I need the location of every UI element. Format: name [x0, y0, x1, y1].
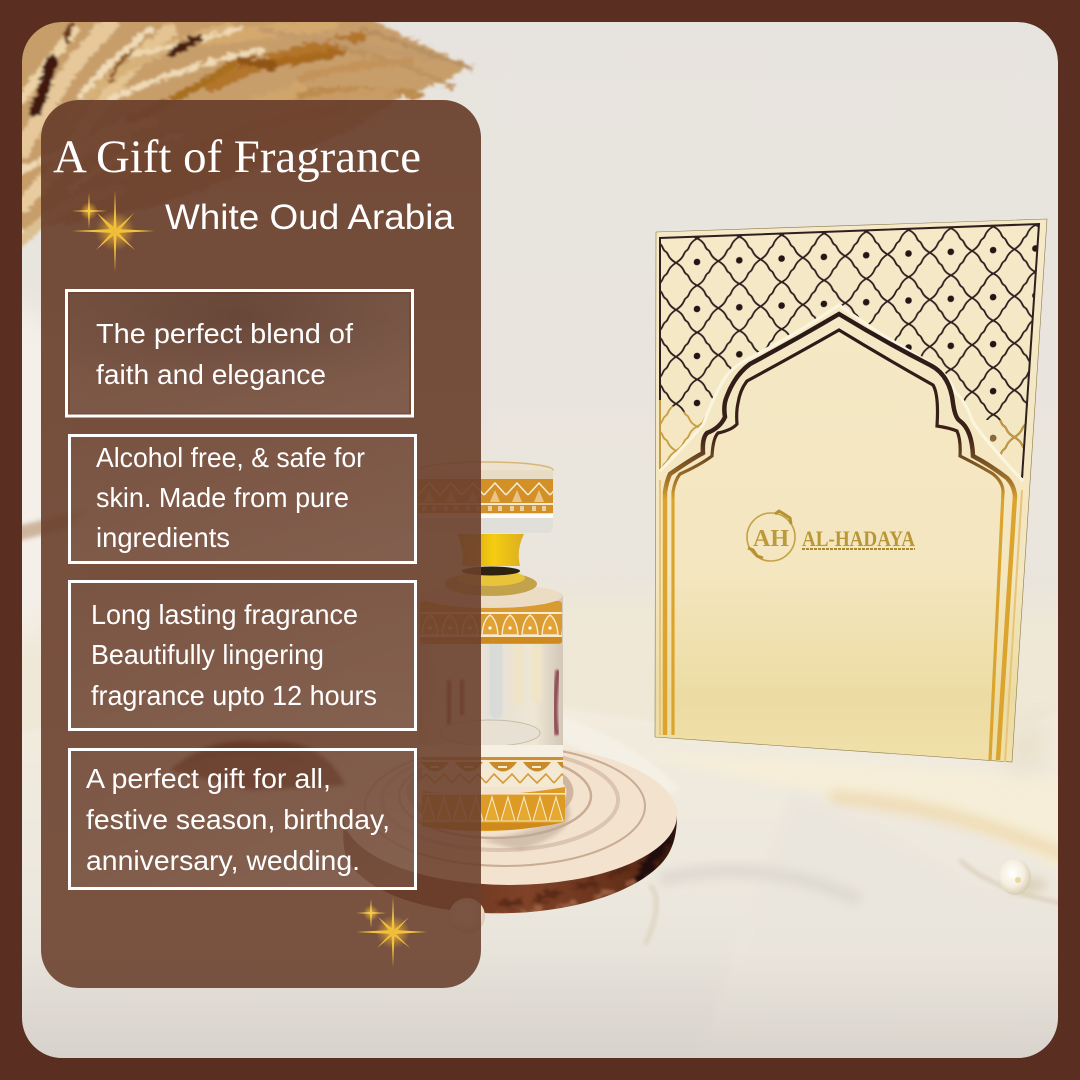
dried pampas grass [12, 12, 472, 240]
feature box 2: skin. Made from pure [96, 482, 349, 513]
wooden disc [343, 745, 677, 918]
feature box 2: ingredients [96, 522, 230, 553]
arch middle line [665, 314, 1015, 760]
feature box 1 [66, 290, 412, 416]
brand logo: AH [753, 526, 789, 552]
box card [655, 219, 1047, 762]
feature box 4: festive season, birthday, [86, 804, 390, 835]
brand logo [747, 511, 915, 561]
feature box 4: anniversary, wedding. [86, 845, 360, 876]
feature box 4 [70, 750, 416, 888]
frame border [660, 224, 1039, 478]
title: A Gift of Fragrance [53, 131, 421, 183]
subtitle: White Oud Arabia [165, 198, 455, 237]
cap [481, 513, 553, 533]
arch emboss [660, 305, 1023, 481]
icon: sparkles bottom [356, 897, 427, 967]
brand logo: AL-HADAYA [802, 526, 915, 551]
lower gold bands [422, 757, 563, 787]
feature box 3 [70, 582, 416, 730]
feature box 2 [70, 436, 416, 562]
translucent text panel [41, 100, 481, 988]
feature box 1: The perfect blend of [96, 318, 353, 349]
feature box 3: fragrance upto 12 hours [91, 680, 377, 711]
dried rose [170, 741, 345, 790]
icon: sparkles top [72, 190, 155, 272]
pearl left [450, 898, 485, 927]
arch inner line [673, 330, 1003, 760]
feature box 3: Beautifully lingering [91, 639, 324, 670]
feature box 2: Alcohol free, & safe for [96, 442, 365, 473]
gift box [650, 215, 1050, 772]
feature box 1: faith and elegance [96, 359, 326, 390]
feature box 3: Long lasting fragrance [91, 599, 358, 630]
top gold band [420, 601, 562, 644]
bottle body [481, 592, 563, 745]
feature box 4: A perfect gift for all, [86, 763, 331, 794]
perfume bottle [418, 462, 565, 831]
pearl right [999, 859, 1047, 895]
silk cloth [0, 300, 1080, 1080]
gold stripes on box [659, 480, 661, 735]
gold neck [457, 534, 524, 566]
lattice pattern [661, 225, 1038, 477]
